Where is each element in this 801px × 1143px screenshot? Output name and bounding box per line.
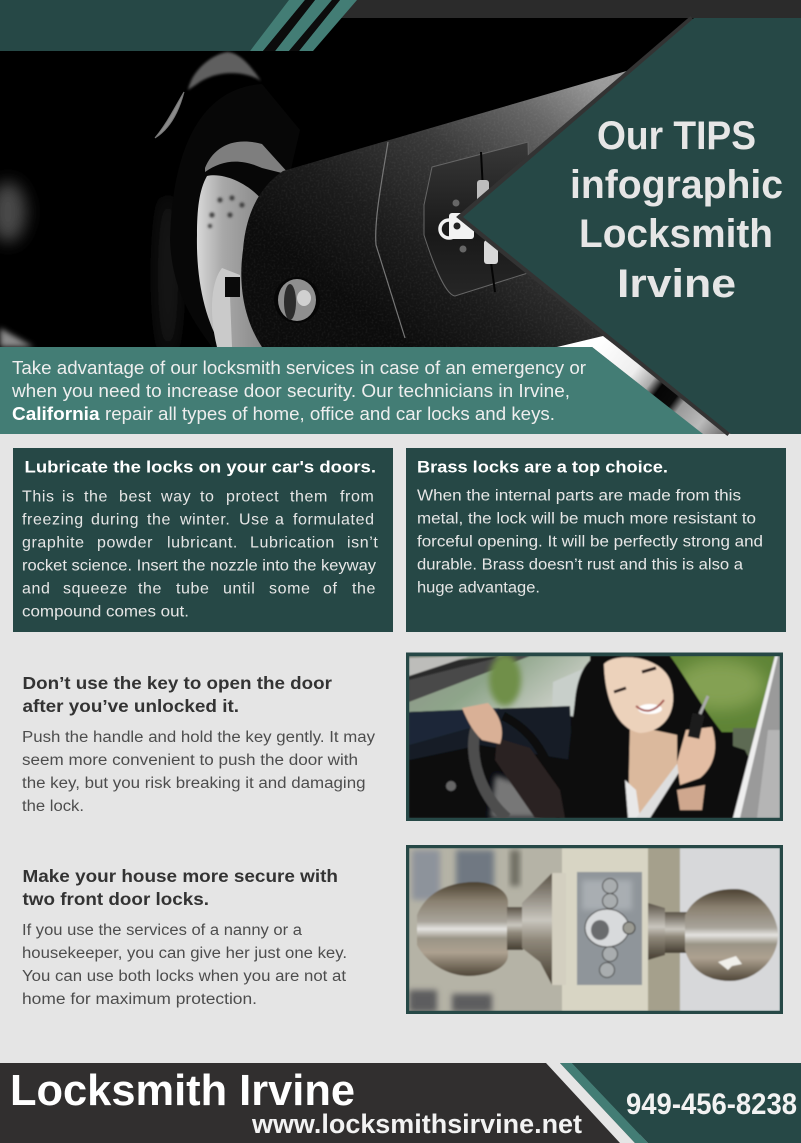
tip heading: two front door locks. [22, 889, 209, 909]
title: infographic [570, 163, 783, 207]
panel body text: squeeze [63, 580, 128, 598]
panel body text: compound comes out. [22, 604, 189, 620]
jacket [625, 738, 748, 811]
panel body text: the [352, 580, 376, 598]
intro text [11, 357, 586, 424]
panel body text: rocket science. Insert the nozzle into the keyway [22, 558, 376, 574]
panel body text: the [147, 512, 171, 528]
lock plate [577, 872, 642, 985]
panel body text: the [138, 580, 162, 598]
footer website: www.locksmithsirvine.net [251, 1109, 582, 1139]
intro text: repair all types of home, office and car locks and keys. [105, 403, 555, 424]
tip body [22, 922, 347, 1008]
intro text: California [12, 403, 100, 424]
jacket sleeve [495, 738, 565, 818]
panel body text: of [323, 580, 338, 598]
panel heading: Lubricate the locks on your car's doors. [24, 458, 376, 476]
photo: door knob lock [406, 845, 783, 1014]
title [570, 114, 783, 306]
tip body: the key, but you risk breaking it and damaging [22, 775, 366, 792]
diagonal stripes [250, 0, 357, 51]
right neck [648, 903, 665, 960]
tip body [22, 729, 375, 815]
hand on wheel [462, 703, 502, 744]
top dark bar [335, 0, 801, 18]
tip heading: Don’t use the key to open the door [22, 673, 332, 693]
face [604, 657, 673, 733]
panel body text: to [200, 488, 215, 506]
fob buttons [424, 142, 531, 296]
key fob body [241, 70, 640, 347]
panel body text: metal, the lock will be much more resistant to [417, 510, 756, 528]
right knob [685, 889, 778, 981]
tip heading: after you’ve unlocked it. [22, 696, 239, 716]
title: Our TIPS [597, 114, 756, 158]
tip body: If you use the services of a nanny or a [22, 922, 302, 939]
tip body: the lock. [22, 798, 84, 815]
footer diagonal stripes [546, 1063, 635, 1143]
tip heading [22, 866, 338, 909]
tip body: seem more convenient to push the door with [22, 752, 358, 769]
panel body text: durable. Brass doesn’t rust and this is also a [417, 556, 743, 574]
panel body text: until [223, 580, 255, 598]
hair [568, 656, 733, 785]
hand with key [677, 727, 715, 785]
title panel [460, 18, 801, 434]
panel body text: is [62, 488, 75, 506]
panel heading: Brass locks are a top choice. [417, 458, 668, 476]
neck and chest [628, 725, 677, 818]
panel body text [22, 488, 378, 620]
footer bar [0, 1063, 801, 1143]
tip body: Push the handle and hold the key gently. It may [22, 729, 375, 746]
intro text: Take advantage of our locksmith services in case of an emergency or [12, 357, 586, 378]
left knob [417, 882, 508, 976]
intro strip [0, 347, 703, 434]
tip: two front door locks [22, 866, 347, 1008]
fob lock icon [440, 200, 474, 252]
panel body text: from [340, 488, 374, 506]
panel body text: tube [176, 580, 210, 598]
panel body text: them [290, 488, 328, 506]
photo: woman in car holding key [406, 652, 783, 821]
panel body text: during [91, 512, 139, 528]
title: Irvine [617, 262, 736, 306]
hero photo: car key fob [0, 0, 801, 434]
latch [585, 909, 629, 947]
tip: don't use the key [22, 673, 375, 815]
panel body text [417, 488, 763, 596]
tip body: housekeeper, you can give her just one key. [22, 945, 347, 962]
panel body text: This [22, 488, 55, 506]
tip heading: Make your house more secure with [22, 866, 338, 886]
panel body text: Use [239, 512, 269, 528]
panel body text: huge advantage. [417, 580, 540, 596]
top teal band [0, 0, 292, 51]
intro text: when you need to increase door security. Our technicians in Irvine, [11, 380, 570, 401]
panel body text: freezing [22, 512, 84, 528]
panel body text: powder [97, 534, 153, 552]
panel body text: protect [226, 488, 279, 506]
panel body text: lubricant. [167, 534, 238, 552]
screws [600, 878, 618, 978]
metal ignition ring [197, 175, 262, 347]
footer phone panel [572, 1063, 801, 1143]
tip body: home for maximum protection. [22, 991, 257, 1008]
panel body text: best [119, 488, 152, 506]
car door frame [733, 656, 780, 818]
reflective streak [557, 336, 731, 434]
panel body text: Lubrication [250, 534, 335, 552]
panel body text: isn’t [347, 534, 378, 552]
panel body text: graphite [22, 534, 85, 552]
panel body text: some [269, 580, 311, 598]
panel body text: the [84, 488, 108, 506]
panel body text: a [275, 512, 284, 528]
fob screw [274, 277, 320, 323]
panel body text: and [22, 580, 50, 598]
panel: brass locks [406, 448, 786, 632]
steering wheel [490, 775, 540, 818]
footer brand name: Locksmith Irvine [10, 1066, 355, 1115]
panel body text: winter. [179, 512, 230, 528]
title: Locksmith [579, 212, 773, 256]
panel body text: formulated [293, 512, 375, 528]
panel body text: way [160, 488, 191, 506]
panel: lubricate the locks [13, 448, 393, 632]
panel body text: forceful opening. It will be perfectly strong and [417, 534, 763, 550]
tip heading [22, 673, 332, 716]
panel body text: When the internal parts are made from this [417, 488, 741, 504]
tip body: You can use both locks when you are not at [22, 968, 347, 985]
